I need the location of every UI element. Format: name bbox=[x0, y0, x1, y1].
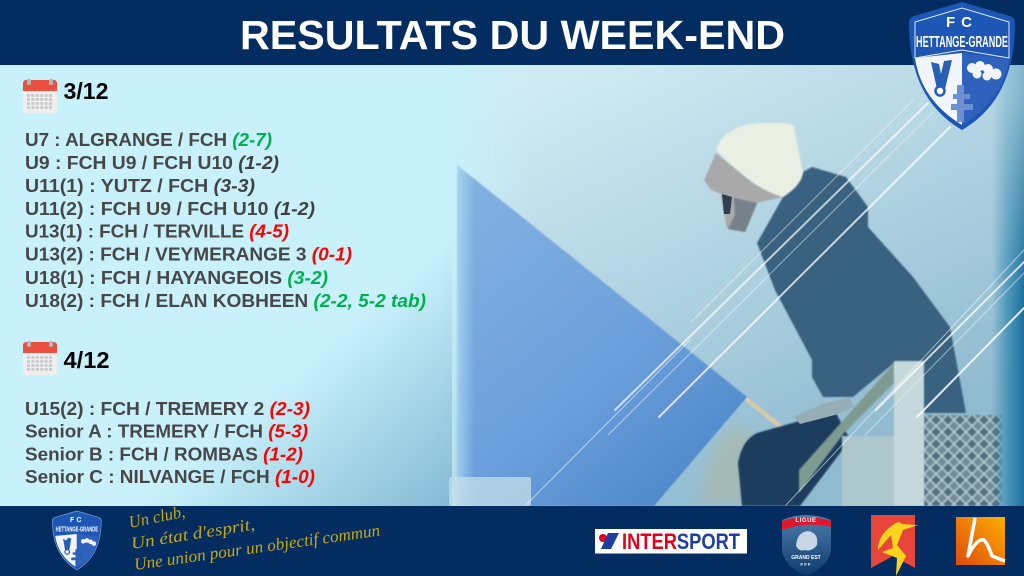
tagline line 3: Une union pour un objectif commun bbox=[133, 521, 381, 574]
logo: Ligue Grand Est FFF bbox=[782, 515, 831, 576]
diagonal light streaks bbox=[526, 100, 1024, 505]
result Senior B: Senior B : FCH / ROMBAS (1-2) bbox=[25, 444, 303, 464]
icon: calendar 3/12 bbox=[23, 79, 57, 114]
tagline bbox=[127, 502, 381, 574]
man face bbox=[704, 153, 783, 232]
tagline line 2: Un état d'esprit, bbox=[130, 515, 256, 553]
result Senior A: Senior A : TREMERY / FCH (5-3) bbox=[25, 420, 308, 442]
footer club crest bbox=[52, 511, 101, 570]
result U9: U9 : FCH U9 / FCH U10 (1-2) bbox=[25, 152, 279, 173]
footer crest text FC: FC bbox=[70, 517, 84, 524]
flag pole bbox=[745, 397, 814, 454]
result U11(2): U11(2) : FCH U9 / FCH U10 (1-2) bbox=[25, 198, 315, 219]
FFF label: FFF bbox=[800, 562, 812, 567]
result Senior C: Senior C : NILVANGE / FCH (1-0) bbox=[25, 466, 315, 487]
distant bushes bbox=[700, 428, 756, 505]
title: RESULTATS DU WEEK-END bbox=[240, 12, 785, 58]
date heading 4/12: 4/12 bbox=[64, 347, 110, 373]
background panel bbox=[0, 60, 1024, 510]
logo: red banner with yellow figure bbox=[871, 515, 918, 576]
man beard and mouth bbox=[728, 198, 757, 232]
result U7: U7 : ALGRANGE / FCH (2-7) bbox=[25, 129, 272, 150]
crest cross of Lorraine bbox=[951, 85, 973, 122]
Intersport wordmark: INTERSPORT bbox=[622, 529, 740, 554]
footer band bbox=[0, 506, 1024, 576]
Grand Est label: GRAND EST bbox=[791, 555, 821, 561]
wooden fence bbox=[799, 361, 924, 506]
crest text FC: FC bbox=[946, 14, 978, 31]
man jacket bbox=[757, 167, 966, 413]
club crest top right bbox=[909, 2, 1015, 130]
results list 3/12 bbox=[25, 129, 426, 311]
result U18(2): U18(2) : FCH / ELAN KOBHEEN (2-2, 5-2 tab) bbox=[25, 290, 426, 311]
flag bbox=[457, 165, 747, 506]
pale block at lower left bbox=[449, 477, 531, 506]
footer crest name: HETTANGE-GRANDE bbox=[56, 526, 98, 534]
header band bbox=[0, 0, 1024, 65]
man hand bbox=[794, 397, 853, 424]
tagline line 1: Un club, bbox=[127, 502, 187, 532]
man beanie bbox=[716, 123, 803, 197]
logo: Intersport bbox=[595, 529, 747, 554]
results list 4/12 bbox=[25, 398, 315, 487]
result U11(1): U11(1) : YUTZ / FCH (3-3) bbox=[25, 175, 255, 196]
result U13(2): U13(2) : FCH / VEYMERANGE 3 (0-1) bbox=[25, 244, 352, 264]
icon: rooster bbox=[796, 531, 817, 550]
date heading 3/12: 3/12 bbox=[64, 78, 108, 104]
man legs bbox=[738, 411, 850, 506]
icon: calendar 4/12 bbox=[23, 341, 57, 376]
right edge fade bbox=[994, 65, 1024, 506]
result U13(1): U13(1) : FCH / TERVILLE (4-5) bbox=[25, 220, 289, 242]
crest flowers bbox=[967, 61, 1002, 80]
crest sword bbox=[931, 60, 952, 89]
photo: supporter shouting with flag bbox=[440, 64, 1024, 508]
wire mesh fence bbox=[924, 415, 1002, 506]
result U15(2): U15(2) : FCH / TREMERY 2 (2-3) bbox=[25, 398, 310, 419]
logo: orange square with h bbox=[956, 517, 1005, 565]
Ligue label: LIGUE bbox=[795, 518, 817, 524]
result U18(1): U18(1) : FCH / HAYANGEOIS (3-2) bbox=[25, 267, 328, 288]
